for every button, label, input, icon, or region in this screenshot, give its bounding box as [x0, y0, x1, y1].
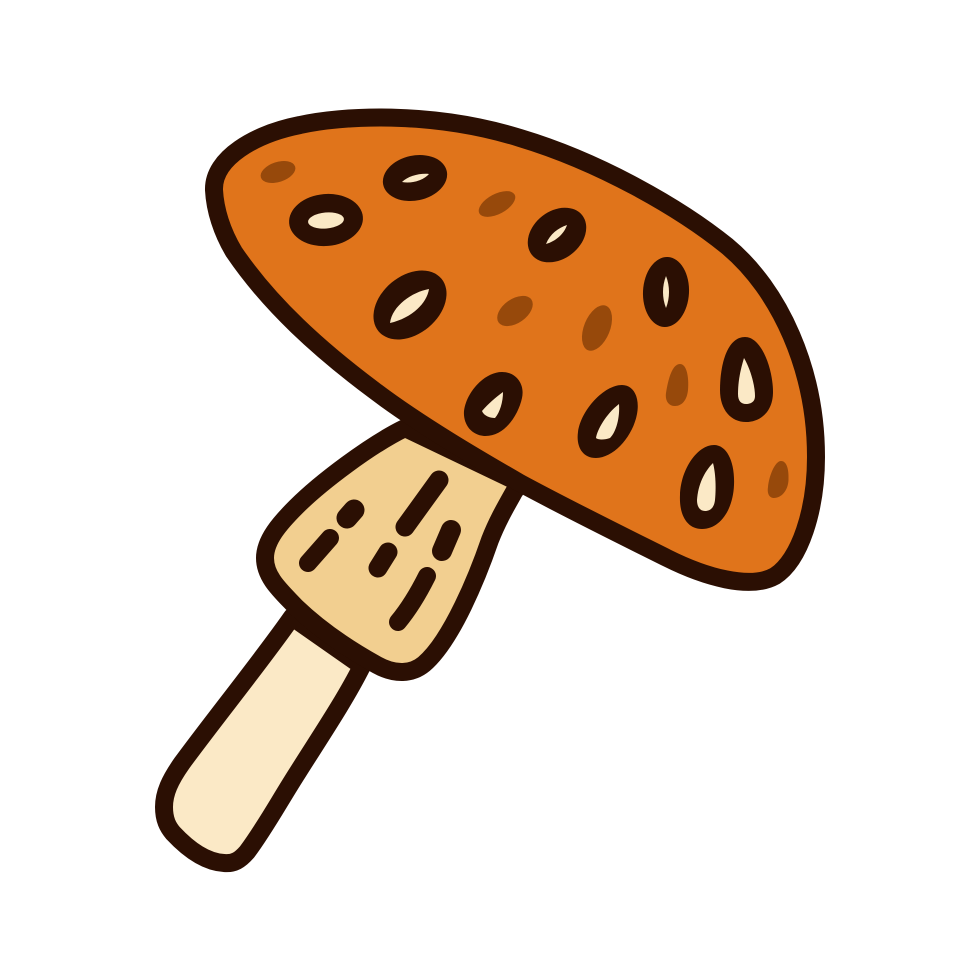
mushroom ring skirt	[265, 428, 520, 672]
darker cap spots	[258, 157, 789, 498]
mushroom stem	[164, 617, 362, 863]
mushroom cap	[214, 117, 816, 582]
ring dashes	[308, 480, 451, 622]
warts cream centres	[307, 174, 755, 511]
warts dark	[287, 149, 773, 529]
